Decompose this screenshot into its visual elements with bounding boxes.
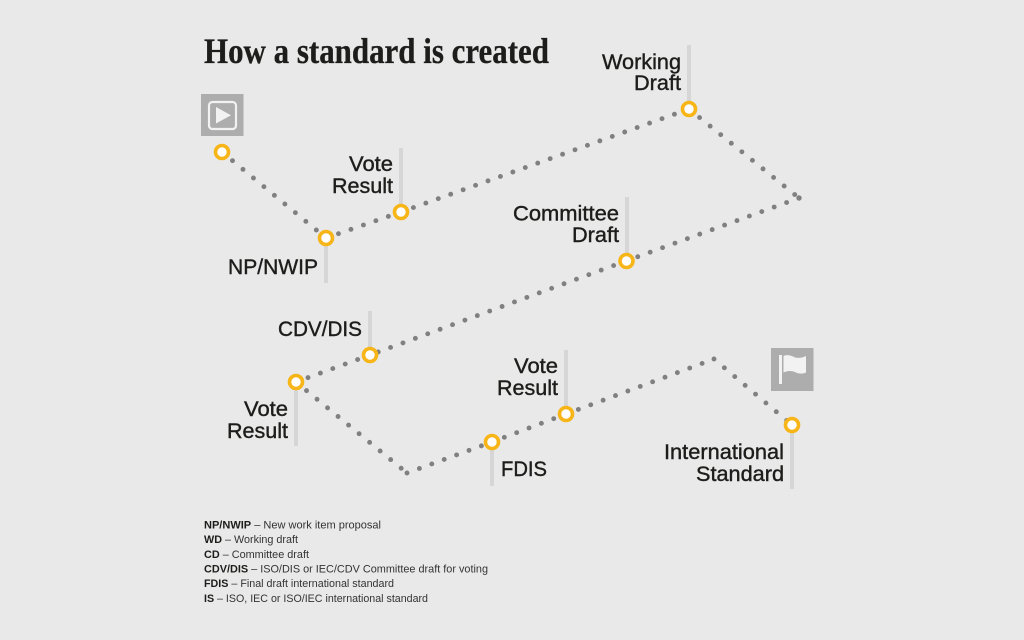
legend: IS – ISO, IEC or ISO/IEC international standard — [204, 593, 428, 605]
legend — [204, 520, 488, 605]
milestone: Committee Draft: Draft — [572, 224, 619, 247]
milestone: CDV/DIS — [278, 311, 376, 362]
milestone: FDIS: FDIS — [501, 458, 547, 481]
milestone: NP/NWIP — [228, 232, 332, 283]
dotted process path — [222, 109, 802, 473]
milestone: Committee Draft: Committee — [513, 202, 619, 226]
legend: FDIS – Final draft international standard — [204, 578, 394, 590]
milestone: International Standard: International — [664, 441, 784, 464]
milestone: Vote Result 2: Result — [227, 420, 288, 443]
milestone: International Standard — [664, 418, 798, 489]
milestone: NP/NWIP: NP/NWIP — [228, 256, 318, 279]
milestone: FDIS — [486, 436, 547, 486]
icon: play start — [201, 94, 244, 136]
milestone: International Standard: Standard — [696, 463, 784, 486]
milestone: Working Draft: Draft — [634, 72, 681, 95]
legend: CDV/DIS – ISO/DIS or IEC/CDV Committee draft for voting — [204, 564, 488, 576]
legend: WD – Working draft — [204, 534, 298, 546]
milestone: Vote Result 1: Vote — [349, 153, 393, 176]
milestone: Vote Result 3: Vote — [514, 355, 558, 378]
legend: NP/NWIP – New work item proposal — [204, 520, 381, 532]
milestone: Working Draft — [602, 45, 696, 116]
milestone: Vote Result 3: Result — [497, 377, 558, 400]
milestone: Vote Result 2 — [227, 376, 302, 446]
milestone: Committee Draft — [513, 197, 633, 268]
icon: flag finish — [771, 348, 814, 391]
milestone: Vote Result 1: Result — [332, 175, 393, 198]
milestone: Vote Result 1 — [332, 148, 408, 218]
milestone: Working Draft: Working — [602, 51, 681, 74]
milestone: Vote Result 2: Vote — [244, 398, 288, 421]
milestone: CDV/DIS: CDV/DIS — [278, 318, 362, 341]
start node — [216, 146, 228, 158]
milestone: Vote Result 3 — [497, 350, 572, 420]
title: How a standard is created — [204, 31, 549, 71]
legend: CD – Committee draft — [204, 549, 309, 561]
